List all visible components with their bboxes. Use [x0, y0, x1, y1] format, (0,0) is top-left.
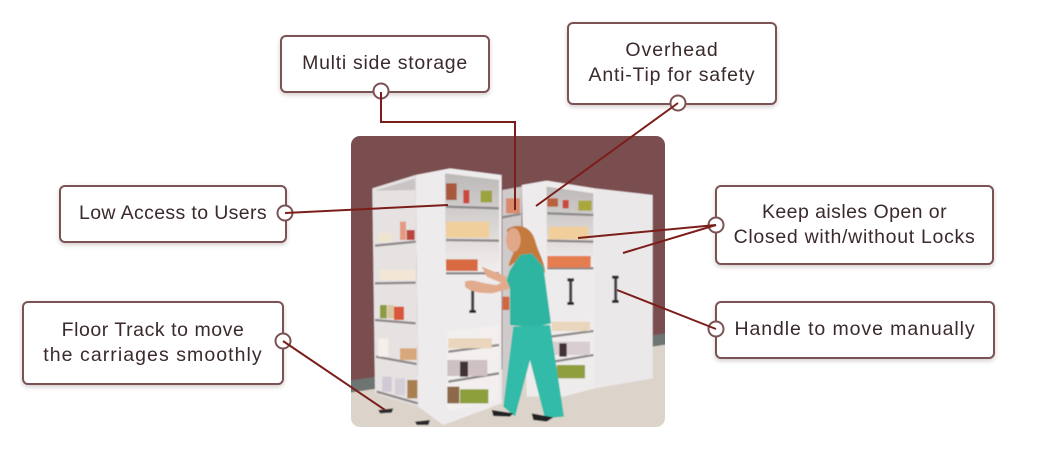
- callout: Overhead Anti-Tip for safety: Overhead: [625, 39, 719, 61]
- callout: Keep aisles Open or Closed: [715, 185, 994, 265]
- callout: Floor Track: Floor Track to move: [62, 318, 244, 340]
- callout: Low Access to Users: Low Access to Users: [79, 202, 267, 224]
- callout: Handle to move manually: Handle to move manually: [735, 318, 975, 340]
- callout: Low Access to Users: [59, 185, 287, 243]
- callout: Overhead Anti-Tip for safety: Anti-Tip for safety: [589, 64, 755, 86]
- callout: Floor Track: the carriages smoothly: [43, 344, 263, 366]
- callout: Handle to move manually: [715, 301, 995, 359]
- callout: Overhead Anti-Tip for safety: [567, 22, 777, 105]
- callout: Keep aisles Open or Closed: Closed with/without Locks: [734, 226, 975, 248]
- callout: Multi side storage: Multi side storage: [302, 52, 468, 74]
- callout: Keep aisles Open or Closed: Keep aisles Open or: [762, 200, 947, 222]
- callout: Multi side storage: [280, 35, 490, 93]
- photo: nurse moving pharmacy storage carriages: [351, 136, 665, 427]
- callout: Floor Track: [22, 301, 284, 385]
